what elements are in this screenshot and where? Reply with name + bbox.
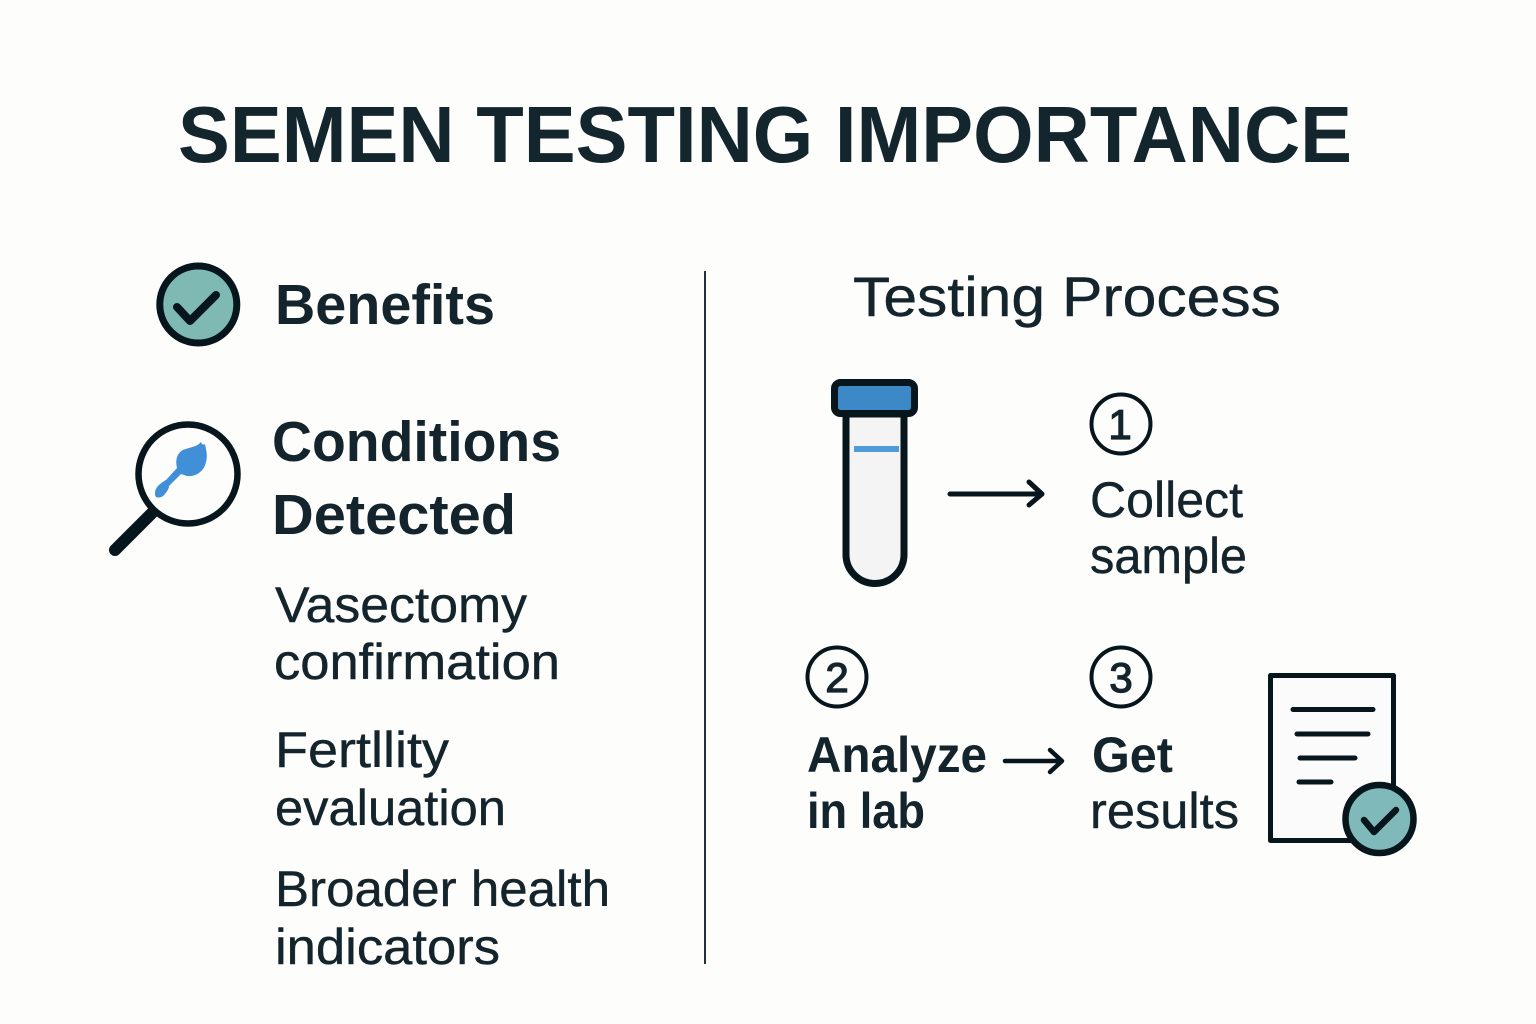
step 2: analyze in lab	[807, 648, 987, 839]
panel: left column	[115, 266, 610, 975]
heading: conditions detected: Detected	[272, 483, 516, 547]
step 3: get results: 3	[1109, 654, 1133, 701]
step 1: collect sample: Collect	[1090, 472, 1243, 528]
icon: magnifying glass	[115, 424, 238, 550]
step 2: analyze in lab: 2	[825, 654, 849, 701]
arrow: analyze to results	[1005, 750, 1062, 772]
step 1: collect sample: 1	[1108, 401, 1132, 448]
step 1: collect sample	[1090, 394, 1247, 584]
text: vasectomy confirmation: Vasectomy	[275, 577, 527, 633]
text: fertility evaluation: evaluation	[275, 780, 506, 836]
arrow: tube to collect	[950, 482, 1042, 505]
panel: testing process	[807, 265, 1414, 853]
text: vasectomy confirmation: confirmation	[274, 634, 560, 690]
step 3: get results: results	[1090, 783, 1239, 839]
text: fertility evaluation	[275, 722, 506, 836]
heading: conditions detected	[272, 410, 561, 547]
step 1: collect sample: sample	[1090, 528, 1247, 584]
text: fertility evaluation: Fertllity	[275, 722, 449, 778]
text: vasectomy confirmation	[274, 577, 560, 690]
text: broader health indicators	[275, 861, 610, 975]
heading: testing process: Testing Process	[853, 265, 1281, 328]
heading: conditions detected: Conditions	[272, 410, 561, 474]
text: broader health indicators: indicators	[275, 919, 500, 975]
step 2: analyze in lab: Analyze	[807, 727, 987, 783]
icon: test tube	[834, 382, 914, 584]
title: SEMEN TESTING IMPORTANCE	[178, 90, 1352, 179]
step 3: get results: Get	[1092, 727, 1173, 783]
step 2: analyze in lab: in lab	[807, 783, 925, 839]
icon: benefits check badge	[160, 266, 237, 343]
icon: results document with check	[1270, 676, 1414, 853]
text: broader health indicators: Broader health	[275, 861, 610, 917]
step 3: get results	[1090, 648, 1239, 839]
heading: benefits: Benefits	[275, 273, 495, 337]
